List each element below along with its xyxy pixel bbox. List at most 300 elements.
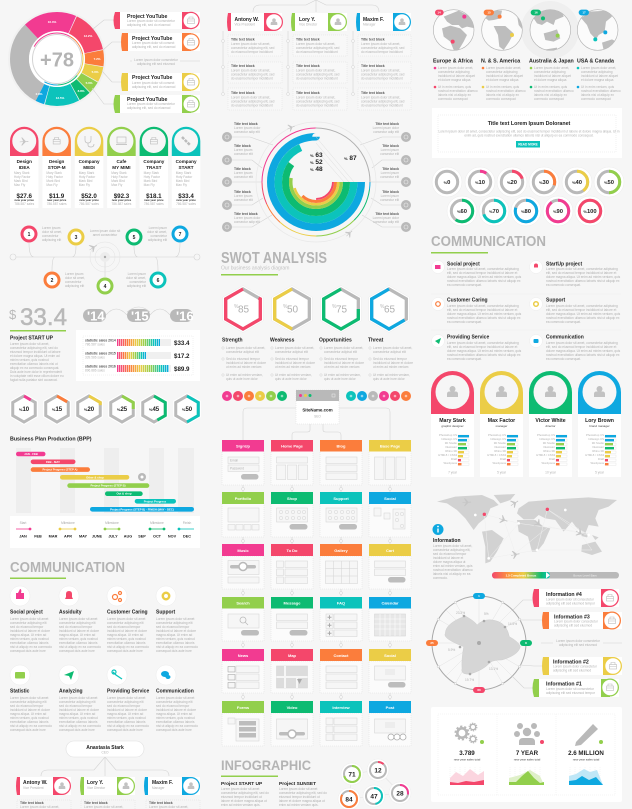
org chart root: anastasia stark	[41, 741, 169, 776]
org card: maxim f bottom-left: Maxim F.	[152, 780, 173, 786]
project sunset text: Project SUNSET	[279, 781, 316, 787]
wireframe: post	[369, 701, 411, 746]
swot descriptions: Ut enim ad minim veniam,	[275, 373, 312, 377]
region lists: commodo consequat	[486, 97, 516, 101]
wireframe: forms: Forms	[237, 705, 250, 710]
org text block grid	[222, 35, 411, 110]
profile: mary stark: 7 year	[448, 470, 458, 474]
region lists: Ut in enim veniam, quis	[581, 85, 615, 89]
hexagon strength	[223, 286, 263, 332]
callout: project youtube orange: adipiscing elit, sed do eiusmod	[132, 45, 176, 49]
numbered timeline: adipiscing elit	[127, 284, 146, 288]
profile skill bars: 3D Studio	[445, 441, 457, 445]
radial chart right labels: Title text block	[375, 212, 399, 216]
card: cafe my mimi: Mark Bird	[111, 179, 125, 183]
communication list right: StartUp project	[546, 262, 582, 268]
card: cafe my mimi: 786.587 sales	[112, 202, 132, 206]
swot descriptions: Lorem ipsum dolor sit amet,	[324, 346, 363, 350]
heading: communication: COMMUNICATION	[10, 560, 125, 576]
donut chart: 5.0%	[86, 81, 93, 85]
wireframe: support: Support	[333, 496, 349, 501]
numbered timeline: 3	[75, 235, 78, 241]
sales bars panel: $33.4	[174, 340, 190, 347]
org text block grid: Title text block	[231, 38, 255, 42]
gantt timeline panel	[10, 516, 200, 548]
stat: gears: 3.789	[459, 750, 475, 757]
org text block grid: Title text block	[361, 64, 385, 68]
donut chart: 13.5%	[56, 96, 65, 100]
circular percentage gauges: %20	[507, 180, 517, 186]
numbered timeline: 7	[179, 232, 182, 238]
swot descriptions: Strength	[222, 338, 243, 344]
callout: project youtube yellow: Project YouTube	[132, 75, 172, 81]
org text block grid: Lorem ipsum dolor sit amet,	[231, 42, 270, 46]
donut chart: 13.2%	[84, 34, 93, 38]
org text block grid: do eiusmod tempor incididunt	[361, 50, 403, 54]
radial bar chart: % 48	[310, 166, 323, 173]
donut chart: +78	[40, 50, 74, 72]
stat: pencil	[568, 724, 604, 785]
wireframe row connectors	[242, 485, 392, 700]
swot descriptions: Sed do eiusmod tempor	[373, 357, 408, 361]
profile: max factor: Max Factor	[488, 418, 515, 424]
profile skill bars: InDesign CS	[588, 437, 604, 441]
browser window	[296, 390, 339, 424]
card: company medi: $52.0	[81, 193, 97, 200]
bubble gauges: 71	[348, 772, 356, 778]
region lists: Lorem ipsum dolor amet,	[486, 66, 521, 70]
org text block grid: Lorem ipsum dolor sit amet,	[361, 42, 400, 46]
region lists: nostrud exercitation ullamco	[534, 89, 574, 93]
swot descriptions: incididunt ut labore et dolore	[324, 361, 364, 365]
callout: information 1: adipiscing elit sed eiusmod tempor	[546, 691, 596, 695]
radial bar chart: % 63	[310, 152, 323, 159]
communication grid: Social project	[10, 610, 43, 616]
profile skill bars: Rhino 3D	[543, 449, 555, 453]
title text panel: enim ad, quis nostrud exercitation ullamco laboris nisi ut aliquip ex ea commodo consequat.	[464, 134, 594, 138]
swot hexagons	[223, 286, 409, 332]
region lists: laboris nisi ut aliquip ex	[534, 93, 567, 97]
gantt chart: FEB - MAY	[46, 460, 60, 464]
circular percentage gauges: %70	[489, 209, 499, 215]
numbered timeline	[10, 226, 200, 294]
card: design stop-m: Mark Bird	[46, 179, 60, 183]
wireframe: portfolio: Portfolio	[235, 496, 252, 501]
region lists: et dolore magna aliqua	[486, 78, 519, 82]
hexagon weakness: %	[283, 304, 288, 310]
profile skill bars: Illustrator	[445, 445, 457, 449]
radial chart right labels: Title block	[382, 167, 399, 171]
numbered timeline: Lorem ipsum	[65, 272, 84, 276]
hexagon 25	[108, 393, 136, 425]
region lists	[433, 58, 621, 101]
wireframe: to do: To Do	[286, 548, 298, 553]
swot descriptions: consectetur adipisci elit	[373, 350, 406, 354]
radial bar chart: % 52	[310, 159, 323, 166]
profile skill bars: 3D Studio	[592, 441, 604, 445]
org text block grid: do eiusmod tempor incididunt	[296, 104, 338, 108]
gantt timeline panel: Milestone	[61, 521, 75, 525]
sales bars panel: 786.587 sales	[85, 342, 105, 346]
wireframe: shop	[271, 492, 313, 537]
region lists: USA & Canada	[577, 58, 614, 64]
gantt chart	[10, 436, 194, 513]
org text blocks bottom-left: Title text block	[84, 801, 108, 805]
list paragraph blocks: Lorem ipsum dolor sit amet, consectetur adipiscing elit, sed do eiusmod tempor incididunt ut labore et dolore magna aliqua. Ut enim ad minim veniam, quis nostrud exercitation ullamco laboris nisi ut aliquip ex ea commodo consequat.	[447, 341, 521, 361]
card: design idea: IDEA	[19, 165, 30, 170]
globes: 17	[582, 10, 586, 14]
card: company start: START	[179, 165, 194, 170]
year pills	[83, 307, 194, 324]
wireframe: post: Post	[386, 705, 395, 710]
org text block grid: Lorem ipsum dolor sit amet,	[296, 96, 335, 100]
gantt timeline panel: OCT	[153, 534, 162, 538]
card: design stop-m: 786.587 sales	[47, 202, 67, 206]
gantt timeline panel: JUNE	[92, 534, 103, 538]
globes	[433, 9, 618, 51]
region lists: incididunt ut labore aliquet	[438, 74, 475, 78]
profile cards	[431, 371, 621, 477]
org text block grid: do eiusmod tempor incididunt	[361, 76, 403, 80]
project start up text: Lorem ipsum dolor sit amet consectetur adipiscing elit, sed do eiusmod tempor incididunt ut labore et dolore magna aliqua ut enim ad minim veniam quis.	[221, 787, 269, 807]
sales bars panel: $17.2	[174, 353, 190, 360]
card: design stop-m: STOP-M	[48, 165, 66, 170]
wireframe: shop: Shop	[287, 496, 298, 501]
hexagon opportunities	[321, 286, 361, 332]
profile skill bars: 3D Studio	[494, 441, 506, 445]
donut chart: 8.8%	[78, 89, 85, 93]
heading: swot analysis: SWOT ANALYSIS	[221, 250, 327, 267]
card: design stop-m: Design	[49, 159, 64, 164]
radar chart: 19.7%	[465, 678, 474, 682]
numbered timeline: dolor sit amet,	[65, 276, 85, 280]
org text block grid: consectetur adipiscing elit, sed	[361, 100, 405, 104]
hexagon 15	[43, 393, 71, 425]
wireframe: social: Social	[384, 496, 396, 501]
region lists: laboris nisi ut aliquip ex	[438, 93, 471, 97]
progress bar	[492, 572, 619, 578]
org text block grid: Title text block	[361, 38, 385, 42]
card: cafe my mimi: new year price	[112, 198, 132, 202]
progress bar: Bonus Level Bars	[573, 574, 597, 578]
percent hexagons	[10, 393, 201, 425]
big number 33.4: $	[9, 307, 17, 322]
swot descriptions: Sed do eiusmod tempor	[226, 357, 261, 361]
sales bars panel	[76, 330, 200, 381]
circular percentage gauges	[432, 167, 624, 226]
card: company trast: Max Fly	[144, 183, 155, 187]
org card: antony w bottom-left: Antony W.	[23, 780, 48, 786]
card: design idea: Mary Stark	[14, 171, 30, 175]
callout: project youtube orange: Project YouTube	[132, 36, 172, 42]
card: cafe my mimi: $92.3	[114, 193, 130, 200]
org text block grid: do eiusmod tempor incididunt	[296, 50, 338, 54]
profile skill bars: Illustrator	[543, 445, 555, 449]
circular percentage gauges: %80	[521, 209, 531, 215]
hexagon opportunities: %	[332, 304, 337, 310]
radial chart right labels	[373, 122, 400, 224]
card: design idea: Max Fly	[14, 183, 26, 187]
wireframe: social share	[369, 649, 411, 693]
wireframe: gallery: Gallery	[334, 548, 349, 553]
org text block grid: Lorem ipsum dolor sit amet,	[361, 96, 400, 100]
hexagon 25: %25	[117, 407, 128, 413]
communication list right: Support	[546, 298, 565, 304]
hexagon 45: %45	[149, 407, 160, 413]
year pills: '14	[87, 308, 105, 324]
callout: project youtube orange	[121, 33, 200, 51]
radial chart right labels: Title text block	[375, 122, 399, 126]
callout: information 4	[532, 589, 619, 607]
sales bars panel: $89.9	[174, 366, 190, 373]
card: cafe my mimi: MY MIMI	[112, 165, 131, 170]
profile skill bars: 3D Studio	[543, 441, 555, 445]
radial chart left labels: consectur elit	[234, 152, 253, 156]
swot descriptions: consectetur adipisci elit	[275, 350, 308, 354]
browser window: SEO	[314, 414, 321, 418]
communication list right: Providing Service	[447, 334, 489, 340]
wireframe: search	[222, 597, 264, 641]
numbered timeline: adipiscing elit	[148, 238, 167, 242]
region lists: consectetur adipiscing	[581, 70, 613, 74]
org card: maxim f bottom-left	[144, 777, 200, 795]
numbered timeline: adipiscing elit	[65, 284, 84, 288]
org text block grid: Title text block	[231, 64, 255, 68]
wireframe: cart: Cart	[386, 548, 395, 553]
heading: communication right: COMMUNICATION	[431, 234, 546, 250]
numbered timeline: dolor sit amet,	[126, 276, 146, 280]
swot descriptions: ut enim ad minim veniam	[275, 365, 311, 369]
wireframe: forms	[222, 701, 264, 746]
donut chart: 16.3%	[48, 20, 57, 24]
wireframe: gallery	[320, 544, 362, 589]
gantt timeline panel: JULY	[108, 534, 118, 538]
card: design idea: 786.587 sales	[14, 202, 35, 206]
radar chart: 23.2%	[456, 611, 465, 615]
communication grid: Support	[156, 610, 175, 616]
org card: antony w	[227, 13, 283, 31]
org card: antony w bottom-left: Vice President	[23, 786, 44, 790]
callout: information 4: adipiscing elit sed eiusmod tempor	[546, 602, 596, 606]
read more button	[516, 141, 540, 148]
profile skill bars: Illustrator	[592, 445, 604, 449]
profile skill bars: Wordpress	[493, 461, 506, 465]
caption between callouts: adipiscing elit sed eiusmod	[137, 62, 175, 66]
card: cafe my mimi: Hoty Factor	[111, 175, 129, 179]
wireframe: social	[369, 492, 411, 537]
region lists: Europe & Africa	[433, 58, 473, 64]
profile: lory brown: brand manager	[589, 424, 610, 428]
numbered timeline: 4	[104, 284, 107, 290]
org card: maxim f	[356, 13, 411, 31]
radar chart: 25	[430, 641, 434, 645]
wireframe: base page	[369, 440, 411, 485]
org text block grid: Lorem ipsum dolor sit amet,	[296, 42, 335, 46]
org text block grid: consectetur adipiscing elit, sed	[361, 46, 405, 50]
caption between callouts	[130, 58, 200, 66]
card: design stop-m: $11.9	[49, 193, 65, 200]
stat: gears	[450, 723, 484, 785]
wireframe: message	[271, 597, 313, 641]
globes: 14	[437, 10, 441, 14]
callout: project youtube yellow: adipiscing elit, sed do eiusmod	[132, 85, 176, 89]
region lists: nostrud exercitation ullamco	[486, 89, 526, 93]
org chart root: anastasia stark: CEO	[102, 750, 109, 754]
communication list right: Social project	[447, 262, 480, 268]
communication list right: Communication	[546, 334, 584, 340]
stat: gears: new year sales total	[454, 758, 481, 762]
radial chart left labels: Lorem ipsum	[234, 194, 253, 198]
sales bars panel: statistic sales 2014	[85, 338, 116, 342]
org text block grid: consectetur adipiscing elit, sed	[231, 100, 275, 104]
circular percentage gauges: %30	[539, 180, 549, 186]
radial chart right labels: Lorem ipsum dolor	[373, 126, 400, 130]
org text blocks bottom-left: Title text block	[20, 801, 44, 805]
wireframe: base page: Base Page	[380, 444, 401, 448]
card: company trast: Hoty Factor	[144, 175, 161, 179]
hexagon 45	[140, 393, 168, 425]
wireframe: map	[271, 649, 313, 693]
bubble gauges: 28	[396, 790, 404, 798]
information block	[432, 524, 473, 580]
callout: information 3: Lorem ipsum dolor consectetur	[554, 620, 599, 624]
card: company medi: MEDI	[83, 165, 95, 170]
communication paragraph blocks	[10, 616, 198, 732]
hexagon strength: 85	[238, 304, 250, 316]
gantt timeline panel: FEB	[34, 534, 42, 538]
communication grid: Customer Caring	[107, 610, 148, 616]
card: company trast: Company	[143, 159, 165, 164]
org text block grid: consectetur adipiscing elit, sed	[296, 72, 340, 76]
org text block grid: Title text block	[296, 38, 320, 42]
radial chart left labels: Title text block	[234, 212, 258, 216]
list paragraph blocks: Lorem ipsum dolor sit amet, consectetur adipiscing elit, sed do eiusmod tempor incididunt ut labore et dolore magna aliqua. Ut enim ad minim veniam, quis nostrud exercitation ullamco laboris nisi ut aliquip ex ea commodo consequat.	[546, 304, 620, 324]
hexagon 20: %20	[84, 407, 95, 413]
card: company medi: Max Fly	[79, 183, 90, 187]
card: company medi: new year price	[79, 198, 99, 202]
wireframe: portfolio	[222, 492, 264, 537]
org text block grid: consectetur adipiscing elit, sed	[361, 72, 405, 76]
radial bar chart	[222, 122, 411, 242]
radial chart right labels: consectur adip elit	[373, 220, 399, 224]
card: company start	[172, 127, 200, 208]
org text block grid: Lorem ipsum dolor sit amet,	[296, 68, 335, 72]
radial chart right labels: consectur adip elit	[373, 130, 399, 134]
org card: maxim f bottom-left: Manager	[152, 786, 166, 790]
profile skill bars: Rhino 3D	[494, 449, 506, 453]
radial chart left labels: Title text block	[234, 122, 258, 126]
swot descriptions: quis ut aute irure dolor	[373, 377, 406, 381]
list paragraph blocks: Lorem ipsum dolor sit amet, consectetur adipiscing elit, sed do eiusmod tempor incididunt ut labore et dolore magna aliqua. Ut enim ad minim veniam, quis nostrud exercitation ullamco laboris nisi ut aliquip ex ea commodo consequat.	[447, 267, 521, 287]
caption between information callouts	[541, 639, 622, 647]
donut connector lines	[92, 20, 122, 104]
numbered timeline: 6	[157, 278, 160, 284]
profile: mary stark: graphic designer	[441, 424, 464, 428]
radial chart right labels: consectur elit	[380, 198, 399, 202]
title text panel: Lorem ipsum dolor sit amet, consectetur adipiscing elit, sed do eiusmod tempor incididunt ut labore et dolore magna aliqua. Ut in	[438, 130, 620, 134]
card: design stop-m: Hoty Factor	[46, 175, 64, 179]
org text block grid: consectetur adipiscing elit, sed	[296, 100, 340, 104]
gantt timeline panel: DEC	[183, 534, 191, 538]
radial chart right labels: Title block	[382, 190, 399, 194]
swot descriptions: incididunt ut labore et dolore	[373, 361, 413, 365]
org text block grid: do eiusmod tempor incididunt	[361, 104, 403, 108]
hexagon threat: %	[380, 304, 385, 310]
globe: europe and africa	[433, 10, 475, 50]
swot descriptions: Weakness	[270, 338, 295, 344]
region lists: Australia & Japan	[529, 58, 574, 64]
globes: 16	[534, 10, 538, 14]
region lists: nostrud exercitation ullamco	[438, 89, 478, 93]
wireframe: interview: Interview	[332, 705, 351, 710]
region lists: Ut in enim veniam, quis	[438, 85, 472, 89]
hexagon threat	[369, 286, 409, 332]
project sunset text: Lorem ipsum dolor sit amet consectetur adipiscing elit, sed do eiusmod tempor incididunt ut labore et dolore magna aliqua ut enim ad minim veniam quis.	[279, 787, 327, 807]
region lists: incididunt ut labore aliquet	[581, 74, 618, 78]
profile skill bars: Wordpress	[542, 461, 555, 465]
wireframe: music	[222, 544, 264, 589]
wireframe: cart	[369, 544, 411, 589]
donut chart: 2.8%	[36, 92, 43, 96]
radial chart right labels: Lorem ipsum	[381, 148, 399, 152]
card: company start: Company	[176, 159, 197, 164]
donut chart: 7.2%	[94, 57, 101, 61]
org card: lory y bottom-left	[80, 777, 135, 795]
gantt timeline panel: AUG	[124, 534, 132, 538]
org card: antony w bottom-left	[16, 777, 71, 795]
card: design stop-m: new year price	[47, 198, 67, 202]
profile skill bars: HTML5 / CSS3	[487, 453, 506, 457]
radar chart: 1	[478, 594, 480, 598]
callout: project youtube red: Lorem ipsum dolor sit consectetur	[127, 19, 176, 23]
card: design idea: Hoty Factor	[14, 175, 31, 179]
profile skill bars: HTML5 / CSS3	[585, 453, 604, 457]
stat: team: new year sales total	[514, 758, 541, 762]
region lists: nostrud exercitation ullamco	[581, 89, 621, 93]
project sunset text	[279, 781, 329, 809]
card: design stop-m	[42, 127, 71, 208]
numbered timeline: dolor sit amet,	[42, 230, 62, 234]
region lists: et dolore magna aliqua	[438, 78, 471, 82]
information block: Lorem ipsum dolor sit amet, consectetur adipiscing elit, sed do eiusmod tempor incididunt ut labore et dolore magna aliqua ut enim ad minim veniam, quis nostrud exercitation ullamco laboris nisi ut aliquip ex ea commodo.	[433, 544, 473, 580]
sales bars panel: 339.586 sales	[85, 356, 105, 360]
gantt timeline panel: MAR	[49, 534, 58, 538]
wireframe: contact: Contact	[334, 653, 349, 658]
swot descriptions: ut enim ad minim veniam	[373, 365, 409, 369]
card: company medi	[75, 127, 103, 208]
gantt chart: JAN - FEB	[24, 452, 38, 456]
radial chart left labels: consectur elit	[234, 198, 253, 202]
profile skill bars: Rhino 3D	[445, 449, 457, 453]
wireframe: signup: Password	[230, 466, 244, 470]
heading: swot analysis	[221, 250, 327, 276]
wireframe: music: Music	[237, 548, 249, 553]
read more button: READ MORE	[518, 142, 538, 146]
card: cafe my mimi: Cafe	[116, 159, 127, 164]
stat: pencil: 2.6 MILLION	[568, 750, 604, 757]
org card: antony w: Vice President	[234, 22, 255, 26]
radar chart: 14.5%	[508, 622, 517, 626]
donut chart	[8, 10, 106, 108]
card: cafe my mimi: Max Fly	[111, 183, 123, 187]
swot descriptions: ut enim ad minim veniam	[324, 365, 360, 369]
hexagon 10	[10, 393, 38, 425]
hexagon 15: %15	[52, 407, 63, 413]
profile skill bars: HTML5 / CSS3	[536, 453, 555, 457]
card: company start: $33.4	[178, 193, 194, 200]
gantt timeline panel: JAN	[19, 534, 27, 538]
card: design idea: $27.6	[17, 193, 33, 200]
